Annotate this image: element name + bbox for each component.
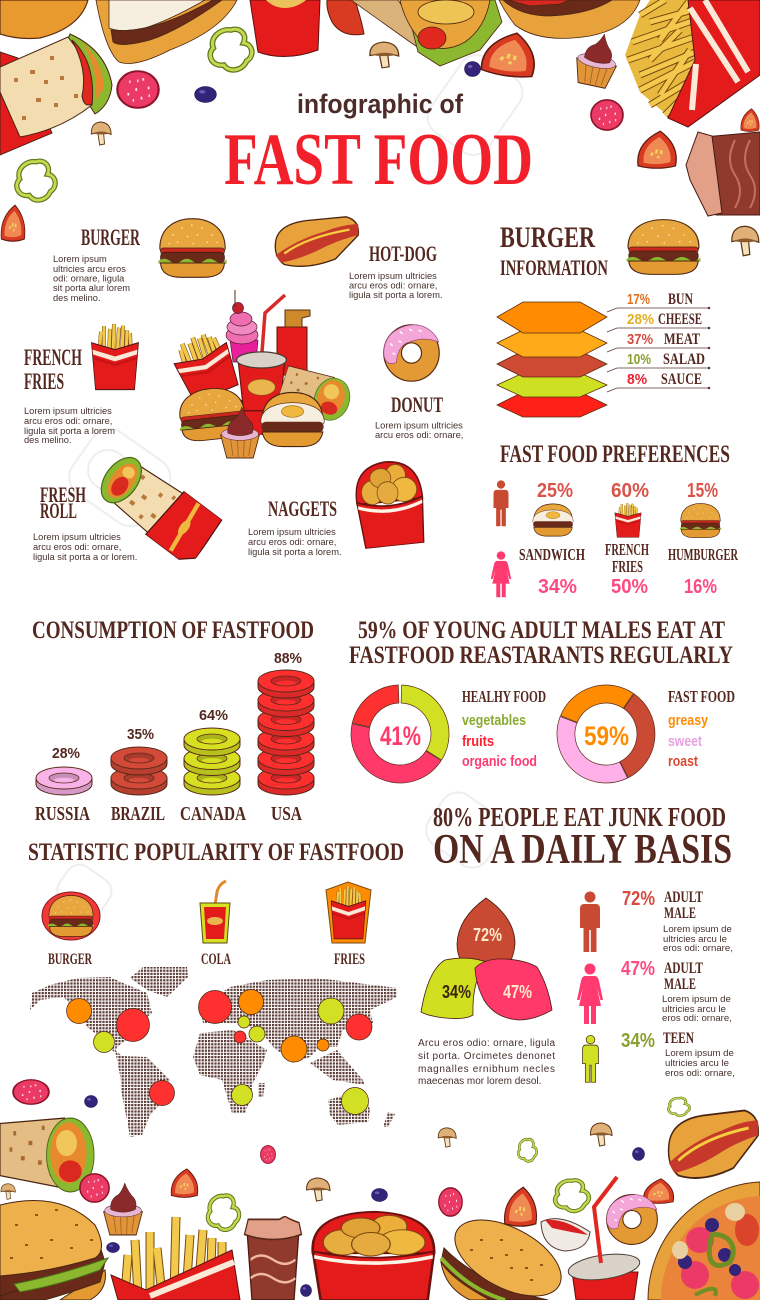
food: olive b — [372, 1188, 387, 1202]
food: tomato edge left — [1, 205, 25, 241]
item: fresh roll: Lorem ipsum ultricies — [33, 532, 121, 542]
item: naggets: ligula sit porta a lorem. — [248, 547, 342, 557]
item: hot-dog: arcu eros odi: ornare, — [349, 280, 437, 290]
legend: healthy food: vegetables — [462, 712, 526, 729]
chart values: 64% — [199, 707, 228, 724]
row: adult female: Lorem ipsum de — [662, 994, 731, 1005]
food: cup with straw — [567, 1177, 641, 1300]
food: cupcake bottom — [104, 1183, 142, 1235]
food: fries bottom — [111, 1217, 240, 1300]
food: wrap left — [0, 34, 112, 155]
item: donut — [375, 325, 463, 440]
heading: burger information: INFORMATION — [500, 255, 608, 280]
item: burger: Lorem ipsum — [53, 254, 107, 264]
top food border — [0, 0, 760, 256]
heading: burger information — [500, 221, 608, 280]
row: adult male: ADULT — [664, 889, 703, 906]
layered hexagon chart — [497, 302, 607, 417]
food: tomato middle — [481, 29, 538, 79]
heading: statistic popularity: STATISTIC POPULARITY OF FASTFOOD — [28, 839, 404, 866]
item: donut: Lorem ipsum ultricies — [375, 420, 463, 430]
icon: cola — [200, 881, 230, 943]
food: mushroom left — [91, 122, 111, 145]
map bubbles — [66, 990, 372, 1114]
row: teen: 34% — [621, 1030, 655, 1052]
item: burger: ultricies arcu eros — [53, 264, 126, 274]
chart: fast food donut: 59% — [584, 721, 629, 751]
country labels: BRAZIL — [111, 803, 165, 825]
legend: burger layers: BUN — [668, 291, 693, 308]
heading: junk food daily — [433, 802, 732, 873]
legend: fast food: roast — [668, 753, 698, 770]
row: teen: Lorem ipsum de — [665, 1048, 734, 1059]
food: tomato far right — [741, 109, 759, 132]
food: mushroom far right — [732, 226, 759, 256]
food: olive c — [632, 1147, 645, 1161]
legend: fast food: greasy — [668, 712, 709, 729]
food: salami a — [13, 1080, 49, 1104]
food: tomato d — [643, 1179, 674, 1203]
item: french fries: FRENCH — [24, 345, 82, 370]
male percentages: 25% — [537, 480, 573, 502]
food: mushroom c — [438, 1128, 456, 1147]
item: naggets: NAGGETS — [268, 496, 337, 521]
legend: burger layers: MEAT — [664, 331, 700, 348]
country labels: RUSSIA — [35, 803, 90, 825]
row: adult female: eros odi: ornare, — [662, 1013, 732, 1024]
chart: brazil stack — [111, 747, 167, 795]
icon: humburger — [680, 503, 721, 538]
panel: junk food daily — [418, 802, 735, 1087]
icon: man — [494, 480, 508, 526]
popularity labels: BURGER — [48, 951, 92, 968]
panel: consumption of fastfood — [32, 617, 314, 825]
country labels: USA — [271, 803, 302, 825]
food: olive a — [84, 1095, 98, 1108]
item: french fries: arcu eros odi: ornare, — [24, 416, 112, 426]
item: burger — [53, 219, 227, 303]
item: french fries: FRIES — [24, 369, 64, 394]
food: olive e — [300, 1284, 312, 1297]
panel: statistic popularity — [28, 839, 404, 1137]
food: wrap top — [351, 0, 502, 66]
popularity labels — [48, 951, 365, 968]
food labels: SANDWICH — [519, 545, 585, 564]
food: tomato top — [327, 0, 364, 35]
item: fresh roll — [33, 447, 224, 567]
item: burger: des melino. — [53, 293, 101, 303]
food: olive left — [195, 87, 216, 102]
row: adult male: ultricies arcu le — [663, 934, 727, 945]
chart: petal diagram — [421, 898, 552, 1020]
female percentages: 50% — [611, 576, 648, 598]
item: fresh roll: FRESH — [40, 482, 86, 507]
food: olive d — [106, 1242, 120, 1253]
food: burger bottom left — [0, 1200, 108, 1300]
bottom food border — [0, 1080, 760, 1300]
row: adult male: MALE — [664, 905, 696, 922]
country labels — [35, 803, 302, 825]
heading: burger information: BURGER — [500, 221, 595, 254]
icon: sandwich — [533, 504, 573, 536]
chart: russia stack — [36, 767, 92, 795]
food: coffee cup right — [686, 132, 760, 216]
food: pepper c — [518, 1139, 537, 1161]
item: naggets — [248, 459, 427, 557]
legend: healthy food: fruits — [462, 733, 494, 750]
food: coffee bottom — [244, 1216, 302, 1300]
food: tomato b — [171, 1169, 198, 1197]
legend: burger layers: 37% — [627, 331, 653, 348]
row: teen: ultricies arcu le — [665, 1058, 729, 1069]
item: burger: sit porta alur lorem — [53, 283, 130, 293]
row: adult male — [580, 888, 733, 954]
food: fries box top right — [625, 0, 760, 127]
food: salami d — [439, 1188, 462, 1216]
chart values — [52, 650, 302, 762]
chart: usa stack — [258, 670, 314, 795]
title — [224, 89, 533, 201]
panel: fast food preferences — [491, 441, 738, 598]
food: tomato c — [504, 1187, 537, 1226]
icon: burger on red plate — [42, 892, 100, 940]
popularity labels: FRIES — [334, 951, 365, 968]
legend: burger layers: 28% — [627, 311, 654, 328]
item: donut: arcu eros odi: ornare, — [375, 430, 463, 440]
food: mushroom top — [370, 42, 399, 68]
icon: woman — [491, 551, 511, 597]
row: adult male: Lorem ipsum de — [663, 924, 732, 935]
food: hot-dog bottom — [669, 1110, 758, 1178]
chart values: 35% — [127, 726, 154, 743]
legend: healthy food: HEALHY FOOD — [462, 687, 546, 706]
food: mushroom edge — [1, 1184, 15, 1199]
heading: young adult males — [349, 617, 733, 669]
panel: food types — [24, 217, 463, 567]
legend: fast food: sweet — [668, 733, 702, 750]
title line: fast food: FAST FOOD — [224, 119, 533, 201]
item: donut: DONUT — [391, 392, 443, 417]
food: donut bottom — [607, 1195, 657, 1244]
legend: burger layers: 17% — [627, 291, 650, 308]
legend: burger layers: SALAD — [663, 351, 705, 368]
food: salami c — [260, 1146, 276, 1163]
food labels: FRENCH — [605, 540, 649, 559]
chart: fast food donut — [557, 685, 655, 783]
chart values: 88% — [274, 650, 302, 667]
food: olive top — [465, 61, 480, 77]
legend: burger layers: SAUCE — [661, 371, 702, 388]
food: cup top — [250, 0, 320, 57]
food: tomato right — [638, 131, 676, 168]
heading: consumption: CONSUMPTION OF FASTFOOD — [32, 617, 314, 644]
row: teen — [583, 1030, 735, 1082]
icon: fries with orange outline — [326, 882, 371, 943]
item: french fries: ligula sit porta a lorem — [24, 426, 115, 436]
item: fresh roll: arcu eros odi: ornare, — [33, 542, 121, 552]
row: adult female: ultricies arcu le — [662, 1004, 726, 1015]
row: teen: TEEN — [663, 1030, 694, 1047]
paragraph: sit porta. Orcimetes denonet — [418, 1051, 555, 1062]
chart: canada stack — [184, 728, 240, 795]
panel: burger information — [497, 220, 710, 417]
male percentages: 60% — [611, 480, 649, 502]
chart: petal diagram: 34% — [442, 982, 471, 1002]
food: pepper d — [669, 1098, 689, 1116]
food: mushroom d — [590, 1123, 612, 1146]
food: sauce cup — [541, 1219, 590, 1251]
legend: burger layers: CHEESE — [658, 311, 702, 328]
female percentages — [538, 576, 717, 598]
legend: healthy food: organic food — [462, 753, 537, 770]
chart: healthy food donut — [351, 685, 449, 783]
food: pepper e — [555, 1180, 589, 1211]
row: teen: eros odi: ornare, — [665, 1068, 735, 1079]
food: salami b — [80, 1174, 109, 1202]
food: bucket bottom — [313, 1212, 434, 1300]
food: bun top left — [0, 0, 88, 38]
chart: petal diagram: 47% — [503, 982, 532, 1002]
icon: french fries — [615, 503, 641, 537]
female percentages: 16% — [684, 576, 717, 598]
food: pepper b — [208, 1196, 239, 1230]
legend: fast food — [668, 687, 735, 770]
food: sandwich top — [96, 0, 237, 64]
item: naggets: Lorem ipsum ultricies — [248, 527, 336, 537]
food: pizza — [648, 1182, 760, 1300]
item: fresh roll: ligula sit porta a or lorem. — [33, 552, 137, 562]
legend: burger layers: 8% — [627, 371, 647, 388]
chart: healthy food donut: 41% — [380, 721, 421, 751]
paragraph: magnalles ernibhum necles — [418, 1064, 555, 1075]
country labels: CANADA — [180, 803, 246, 825]
popularity labels: COLA — [201, 951, 231, 968]
item: french fries — [24, 324, 138, 445]
item: hot-dog: Lorem ipsum ultricies — [349, 271, 437, 281]
food labels: FRIES — [612, 557, 643, 576]
legend: burger layers — [627, 291, 705, 388]
item: hot-dog: HOT-DOG — [369, 241, 437, 266]
item: fresh roll: ROLL — [40, 498, 77, 523]
male percentages: 15% — [687, 480, 718, 502]
item: burger: BURGER — [81, 225, 140, 250]
row: adult male: 72% — [622, 888, 655, 910]
food labels — [519, 540, 738, 576]
item: hot-dog: ligula sit porta a lorem. — [349, 290, 443, 300]
item: french fries: des melino. — [24, 435, 72, 445]
panel: young adult males — [349, 617, 735, 783]
food: pepper ring left — [17, 161, 55, 200]
row: adult female: 47% — [621, 958, 655, 980]
icon: burger with cheese — [627, 220, 700, 274]
row: adult female: ADULT — [664, 960, 703, 977]
row: adult female: MALE — [664, 976, 696, 993]
female percentages: 34% — [538, 576, 577, 598]
paragraph: maecenas mor lorem desol. — [418, 1076, 541, 1087]
food: pepper ring top — [210, 29, 252, 70]
item: french fries: Lorem ipsum ultricies — [24, 406, 112, 416]
illustration: fast food collection — [168, 290, 355, 458]
item: naggets: arcu eros odi: ornare, — [248, 537, 336, 547]
legend: burger layers: 10% — [627, 351, 651, 368]
food: burger bottom center — [441, 1204, 573, 1300]
chart: dotted world map — [30, 967, 397, 1137]
legend: healthy food — [462, 687, 546, 770]
chart values: 28% — [52, 745, 80, 762]
food: salami right — [591, 100, 623, 130]
food: mushroom b — [307, 1178, 330, 1201]
row: adult male: eros odi: ornare, — [663, 943, 733, 954]
food: salami left — [117, 71, 159, 108]
food: cupcake top — [572, 29, 622, 90]
male percentages — [537, 480, 718, 502]
paragraph: Arcu eros odio: ornare, ligula — [418, 1038, 555, 1049]
food: wrap bottom left — [0, 1118, 94, 1192]
item: hot-dog — [275, 217, 443, 300]
item: burger: odi: ornare, ligula — [53, 274, 125, 284]
chart: petal diagram: 72% — [473, 925, 502, 945]
title line: infographic of: infographic of — [297, 89, 464, 119]
row: adult female — [577, 958, 732, 1024]
food: burger top — [499, 0, 640, 38]
